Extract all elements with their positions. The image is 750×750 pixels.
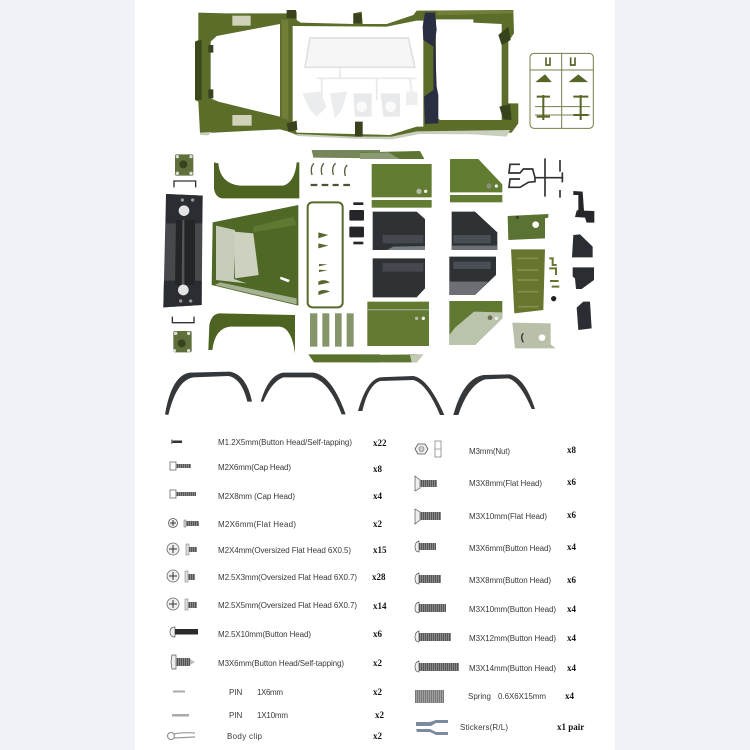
top bracket xyxy=(174,181,196,187)
lower strip end xyxy=(360,354,423,362)
frame latches and posts xyxy=(208,10,512,137)
row M2X6mm flat: M2X6mm(Flat Head) xyxy=(218,520,296,529)
navy seat bulkhead xyxy=(423,13,438,124)
small black nut xyxy=(551,296,556,301)
row M2.5X10mm: M2.5X10mm(Button Head) xyxy=(218,630,311,639)
row M2X6mm cap: x8 xyxy=(373,464,382,474)
lower door 2 xyxy=(449,301,502,345)
black mount 1 xyxy=(572,234,593,257)
windscreen small parts xyxy=(318,232,330,295)
white centre panel xyxy=(135,0,615,750)
row M3X12mm button: M3X12mm(Button Head) xyxy=(469,634,556,643)
wheel arch flare 3 xyxy=(358,376,444,415)
row PIN 1X6mm: 1X6mm xyxy=(257,688,283,697)
silver plate xyxy=(512,323,556,348)
row PIN 1X10mm xyxy=(172,710,384,720)
row M3X6mm self-tapping: x2 xyxy=(373,658,382,668)
hinge strips xyxy=(310,313,354,347)
bottom servo mount xyxy=(173,331,192,352)
row M3X10mm flat: x6 xyxy=(567,510,576,520)
black roll bar sprue xyxy=(509,158,563,198)
row Spring xyxy=(415,690,574,703)
row M3X6mm button xyxy=(415,541,576,553)
row M3X6mm button: M3X6mm(Button Head) xyxy=(469,544,551,553)
row M1.2X5mm: M1.2X5mm(Button Head/Self-tapping) xyxy=(218,438,352,447)
vent grilles xyxy=(232,16,251,26)
black door liner 3 xyxy=(373,258,425,297)
row M2X6mm cap xyxy=(170,462,382,474)
olive small-parts sprue xyxy=(530,53,593,128)
row M3X8mm flat: M3X8mm(Flat Head) xyxy=(469,479,542,488)
row M2X8mm cap: M2X8mm (Cap Head) xyxy=(218,492,295,501)
row Stickers: x1 pair xyxy=(557,722,584,732)
panel: door parts xyxy=(358,151,594,415)
row M2X6mm flat: x2 xyxy=(373,519,382,529)
panel: right hardware list xyxy=(415,441,584,735)
lower strip xyxy=(308,354,380,362)
row Spring: 0.6X6X15mm xyxy=(498,692,546,701)
top wing panel xyxy=(214,162,299,198)
row M3X8mm flat: x6 xyxy=(567,477,576,487)
bottom wing panel xyxy=(208,313,295,353)
wire clips xyxy=(311,163,347,176)
upper door 2 xyxy=(450,159,502,202)
ribbed panel xyxy=(511,249,545,313)
row M3X8mm button xyxy=(415,573,576,585)
row Stickers xyxy=(416,720,584,735)
row M2X6mm cap: M2X6mm(Cap Head) xyxy=(218,463,291,472)
bottom bracket xyxy=(172,317,194,323)
black door liner 1 xyxy=(373,212,425,250)
row M3X12mm button: x4 xyxy=(567,633,576,643)
row M3mm nut: x8 xyxy=(567,445,576,455)
row M3X14mm button: M3X14mm(Button Head) xyxy=(469,664,556,673)
row M3X10mm button xyxy=(415,602,576,614)
row M1.2X5mm: x22 xyxy=(373,438,387,448)
row Body clip: x2 xyxy=(373,731,382,741)
row M2.5X3mm: x28 xyxy=(372,572,386,582)
row M3X8mm button: x6 xyxy=(567,575,576,585)
strip end xyxy=(360,151,424,159)
row PIN 1X6mm: x2 xyxy=(373,687,382,697)
row M2.5X5mm xyxy=(167,598,387,611)
lower door 1 xyxy=(367,302,429,346)
panel: front parts xyxy=(163,150,380,415)
clear window sprue xyxy=(302,38,418,118)
row M2.5X3mm xyxy=(167,570,386,582)
row M2X4mm: x15 xyxy=(373,545,387,555)
wheel arch flare 1 xyxy=(165,372,252,415)
row M2.5X10mm xyxy=(170,627,382,639)
small screws row xyxy=(311,181,350,188)
row M3X12mm button xyxy=(415,631,576,643)
row Spring: Spring xyxy=(468,692,491,701)
row M3X10mm flat: M3X10mm(Flat Head) xyxy=(469,512,547,521)
green bulkhead plate xyxy=(508,214,548,240)
olive body frame xyxy=(195,10,518,138)
wheel arch flare 2 xyxy=(261,373,346,414)
black mount 3 xyxy=(577,302,592,330)
top servo mount xyxy=(175,154,193,176)
small olive parts xyxy=(549,258,559,287)
row M3mm nut: M3mm(Nut) xyxy=(469,447,510,456)
row M3X6mm self-tapping: M3X6mm(Button Head/Self-tapping) xyxy=(218,659,344,668)
bonnet xyxy=(212,205,298,306)
row M3X8mm flat xyxy=(415,476,576,491)
row Body clip: Body clip xyxy=(227,732,263,741)
row M3X6mm button: x4 xyxy=(567,542,576,552)
row M2.5X3mm: M2.5X3mm(Oversized Flat Head 6X0.7) xyxy=(218,573,357,582)
row PIN 1X10mm: x2 xyxy=(375,710,384,720)
row M2.5X5mm: x14 xyxy=(373,601,387,611)
row M2X8mm cap: x4 xyxy=(373,491,382,501)
black mount 2 xyxy=(573,267,594,289)
row M3X14mm button xyxy=(415,661,576,673)
wheel arch flare 4 xyxy=(453,374,535,415)
row M3mm nut xyxy=(415,441,576,457)
row M3X8mm button: M3X8mm(Button Head) xyxy=(469,576,551,585)
black bracket xyxy=(573,191,594,223)
row PIN 1X6mm: PIN xyxy=(229,688,243,697)
row M3X10mm button: M3X10mm(Button Head) xyxy=(469,605,556,614)
row M1.2X5mm xyxy=(171,438,387,448)
row M2.5X10mm: x6 xyxy=(373,629,382,639)
row PIN 1X6mm xyxy=(173,687,382,697)
row Body clip xyxy=(168,731,382,741)
black door liner 4 xyxy=(449,257,496,295)
frame highlights xyxy=(282,11,513,120)
row M2.5X5mm: M2.5X5mm(Oversized Flat Head 6X0.7) xyxy=(218,601,357,610)
row PIN 1X10mm: PIN xyxy=(229,711,243,720)
row M3X10mm flat xyxy=(415,509,576,524)
panel: main body frame and sprues xyxy=(195,10,593,139)
row M2X4mm xyxy=(167,543,387,555)
row M2X6mm flat xyxy=(168,518,382,529)
window strip xyxy=(312,150,380,158)
row M3X6mm self-tapping xyxy=(171,655,382,669)
black door liner 2 xyxy=(452,212,497,250)
row M2X4mm: M2X4mm(Oversized Flat Head 6X0.5) xyxy=(218,546,351,555)
black bumper plate xyxy=(163,194,203,307)
row Spring: x4 xyxy=(565,691,574,701)
small black parts xyxy=(349,202,364,244)
windscreen frame xyxy=(308,202,343,307)
row M3X10mm button: x4 xyxy=(567,604,576,614)
row M3X14mm button: x4 xyxy=(567,663,576,673)
upper door 1 xyxy=(372,164,432,208)
row PIN 1X10mm: 1X10mm xyxy=(257,711,288,720)
row M2X8mm cap xyxy=(170,490,382,501)
row Stickers: Stickers(R/L) xyxy=(460,723,508,732)
panel: left hardware list xyxy=(167,438,387,741)
